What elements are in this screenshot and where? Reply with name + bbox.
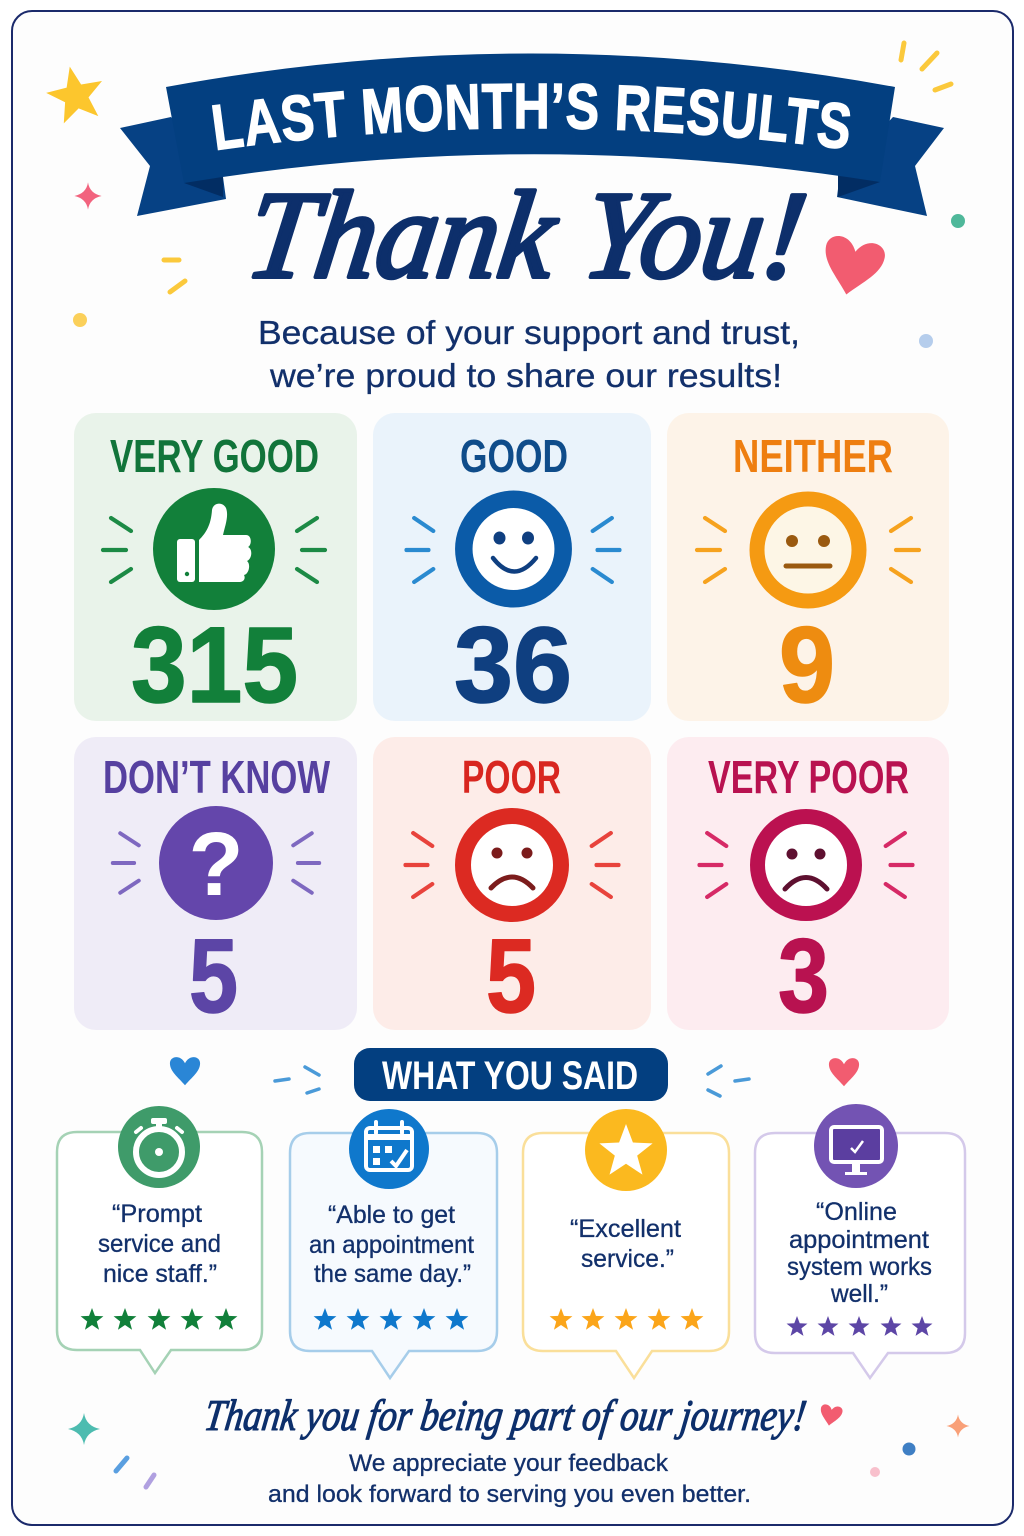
panel: poor [373, 737, 651, 1035]
rating stars [787, 1316, 932, 1336]
quote: nice staff.” [103, 1260, 217, 1288]
panel: very poor [667, 737, 949, 1035]
bubble: excellent service [523, 1109, 729, 1378]
rating stars [81, 1308, 237, 1330]
quote: service and [98, 1230, 221, 1258]
panel: neither [667, 413, 949, 725]
intro text [258, 314, 800, 394]
panel: poor: 5 [486, 918, 536, 1035]
quote: well.” [830, 1280, 888, 1308]
bubble: prompt service [57, 1106, 262, 1373]
quote: service.” [581, 1245, 674, 1273]
rating stars [314, 1308, 468, 1330]
icon: star [585, 1109, 667, 1191]
panel: don't know [74, 737, 357, 1035]
intro text: Because of your support and trust, [258, 314, 800, 351]
decoration: header confetti [42, 43, 965, 348]
banner: last month's results: LAST MONTH’S RESULTS [212, 83, 850, 150]
panel: very good [74, 413, 357, 725]
quote: an appointment [309, 1231, 474, 1259]
quote: appointment [789, 1226, 929, 1254]
footer text: We appreciate your feedback [349, 1450, 669, 1477]
decoration: around heading [170, 1057, 859, 1096]
quote: “Online [816, 1198, 897, 1226]
panel: very poor: 3 [778, 918, 829, 1035]
title: thank you: Thank You! [239, 167, 815, 305]
panel: neither: NEITHER [733, 430, 893, 482]
panel: very good: 315 [131, 604, 298, 725]
panel: very poor: VERY POOR [708, 751, 909, 803]
panel: don't know: ? [189, 815, 243, 915]
quote: the same day.” [314, 1260, 471, 1288]
panel: poor: POOR [462, 751, 561, 803]
decoration: footer confetti [68, 1404, 970, 1487]
banner: last month's results [120, 54, 944, 216]
panel: good: GOOD [460, 430, 568, 482]
icon: calendar [349, 1109, 429, 1189]
heading: what you said: WHAT YOU SAID [382, 1054, 638, 1098]
footer script line: Thank you for being part of our journey! [202, 1391, 809, 1440]
quote [98, 1200, 221, 1288]
panel: don't know: 5 [189, 918, 238, 1035]
quote: “Able to get [328, 1201, 455, 1229]
quote [787, 1198, 932, 1308]
bubble: online appointment [755, 1104, 965, 1378]
rating stars [550, 1308, 703, 1330]
quote: system works [787, 1253, 932, 1281]
bubble: same day appointment [290, 1109, 497, 1378]
footer text: and look forward to serving you even better. [268, 1481, 751, 1508]
icon: monitor [814, 1104, 898, 1188]
intro text: we’re proud to share our results! [269, 357, 782, 394]
panel: don't know: DON’T KNOW [103, 751, 330, 803]
quote: “Excellent [570, 1215, 681, 1243]
panel: good [373, 413, 651, 725]
icon: stopwatch [118, 1106, 200, 1188]
quote: “Prompt [112, 1200, 202, 1228]
footer text [268, 1450, 751, 1508]
quote [309, 1201, 474, 1288]
panel: very good: VERY GOOD [110, 430, 319, 482]
panel: neither: 9 [779, 604, 835, 725]
heading: what you said [354, 1048, 668, 1101]
panel: good: 36 [454, 604, 572, 725]
quote [570, 1215, 681, 1273]
